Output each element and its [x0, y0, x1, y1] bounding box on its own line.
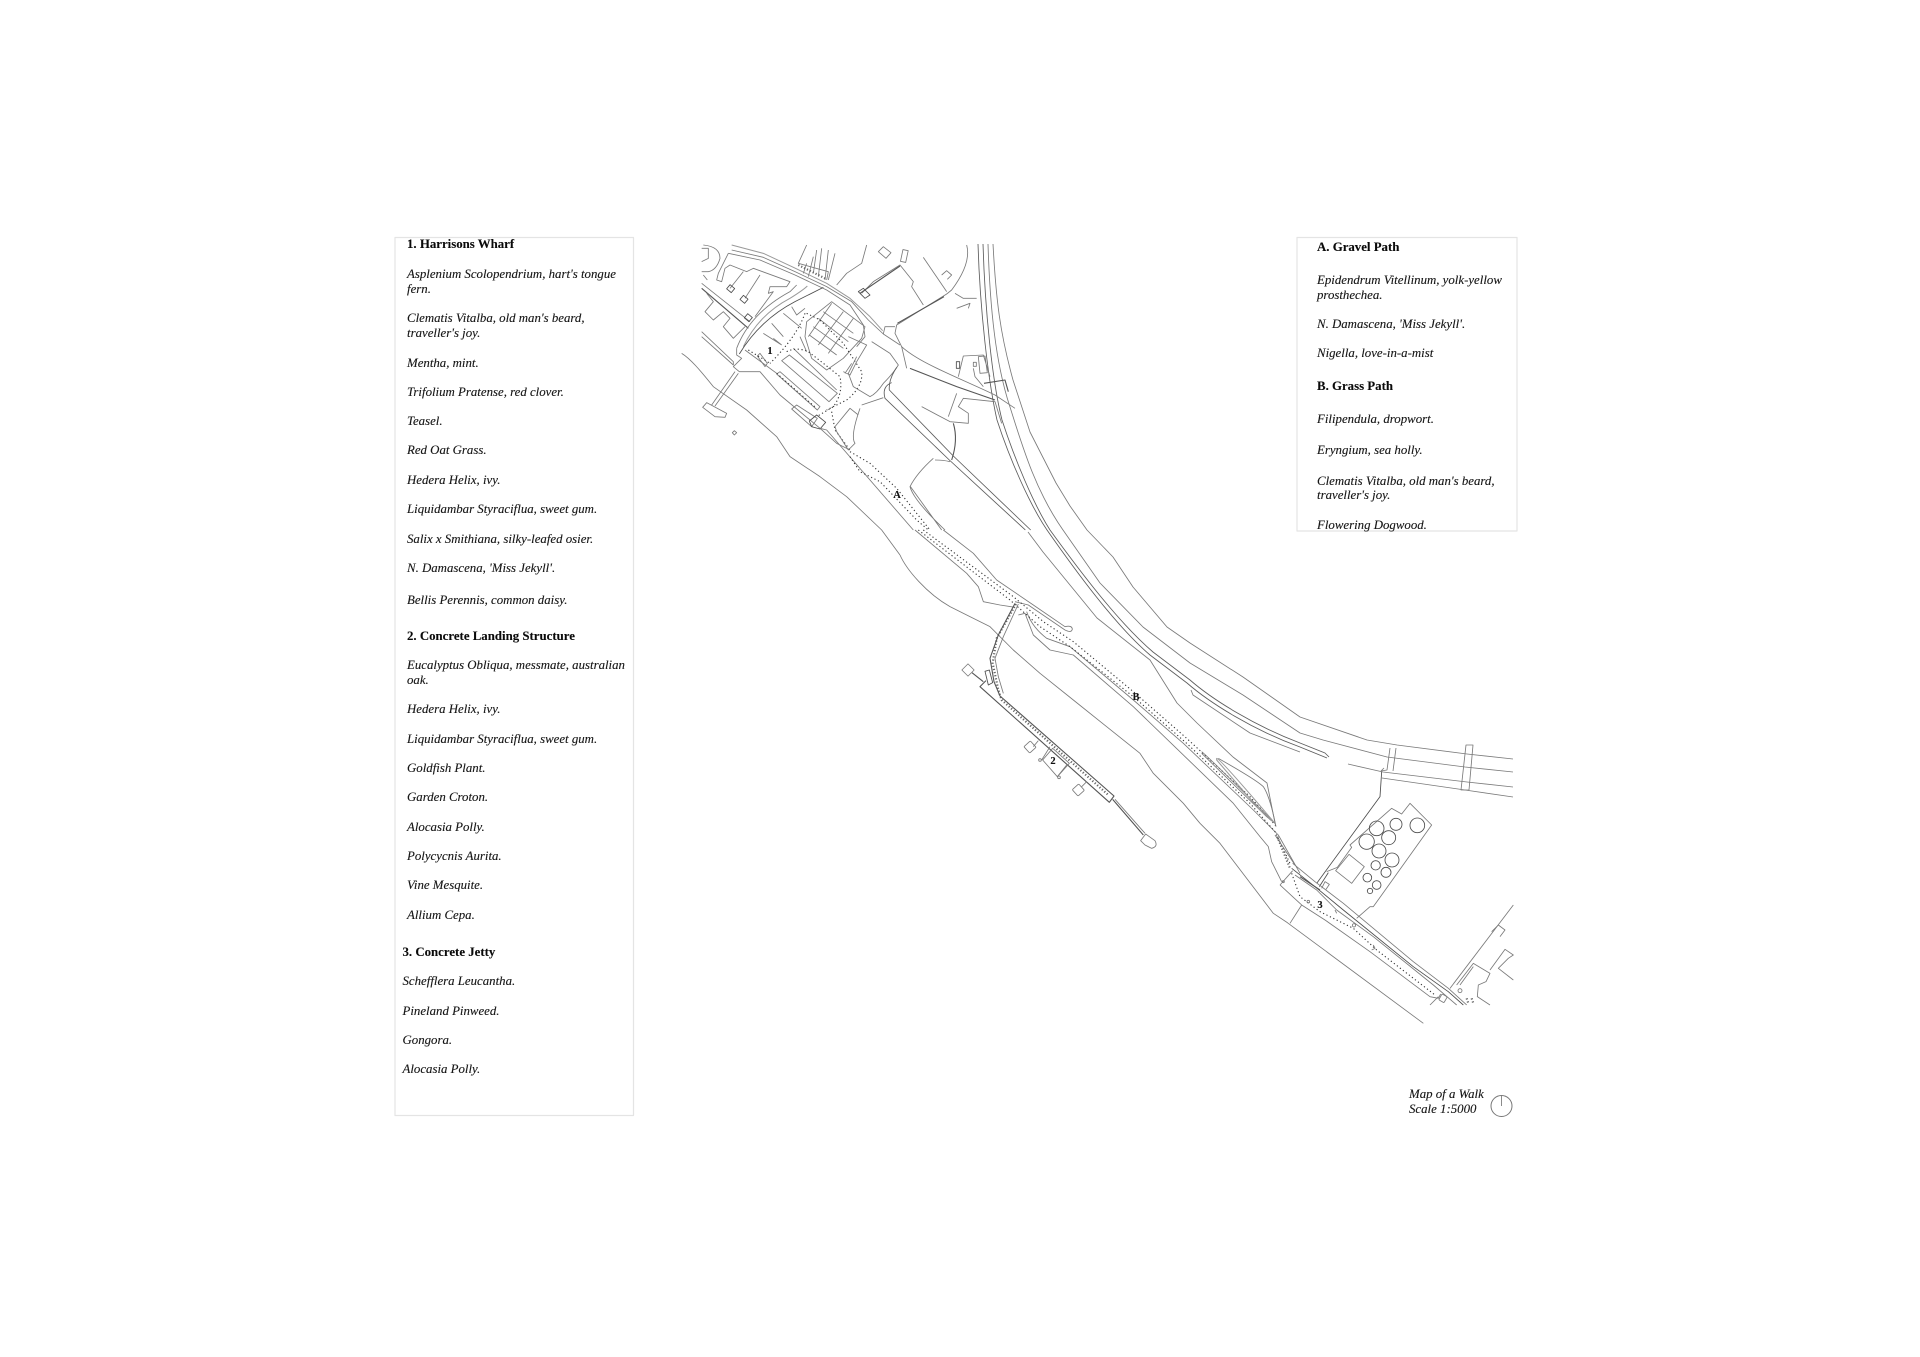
text block: Landing Structure plants: Alocasia Polly.: [406, 820, 485, 834]
text block: Grass Path plants: Eryngium, sea holly.: [1316, 443, 1423, 457]
path label B: B: [1132, 692, 1140, 703]
panel: path planting list: [1297, 238, 1517, 532]
river bank and middle walk section: [900, 530, 1300, 882]
upper path edge with end blob: [943, 530, 1072, 631]
location label 2: 2: [1050, 756, 1056, 767]
outer river bank: [900, 555, 1200, 823]
housing blocks: [702, 245, 835, 352]
map title and scale: Map of a Walk: [1408, 1087, 1484, 1101]
text block: Harrisons Wharf plants: traveller's joy.: [407, 326, 480, 340]
text block: Landing Structure plants: Garden Croton.: [407, 790, 488, 804]
junction walkway and jetty 2: [962, 603, 1156, 848]
planting strips: [1202, 752, 1276, 827]
text block: Grass Path plants: Filipendula, dropwort.: [1316, 412, 1434, 426]
square tank building: [1336, 854, 1364, 883]
text block: Gravel Path plants: [1316, 273, 1502, 360]
small jetty markers: [1282, 881, 1375, 950]
text block: Concrete Jetty plants: Gongora.: [402, 1033, 452, 1047]
text block: Landing Structure plants: Goldfish Plant.: [407, 761, 486, 775]
top road: [728, 245, 900, 347]
shoreline: [682, 353, 900, 555]
map of the walk: [682, 244, 1513, 1023]
dotted walk rows: [918, 530, 1290, 863]
storage tanks: [1359, 818, 1425, 894]
text block: Harrisons Wharf plants: Salix x Smithiana, silky-leafed osier.: [407, 532, 593, 546]
text block: Gravel Path plants: Epidendrum Vitellinum, yolk-yellow: [1316, 273, 1502, 287]
text block: Gravel Path plants: N. Damascena, 'Miss Jekyll'.: [1316, 317, 1465, 331]
icon: north point: [1491, 1096, 1512, 1116]
panel: site planting list: [395, 237, 634, 1116]
tank farm boundary: [1327, 803, 1432, 918]
pier and buildings on the shore: [703, 372, 850, 450]
dotted walk: [1277, 837, 1435, 995]
parallel service lines: [1275, 835, 1467, 1005]
lower path edges: [1018, 612, 1300, 882]
text block: Gravel Path plants: prosthechea.: [1316, 288, 1383, 302]
text block: Grass Path plants: [1316, 412, 1495, 532]
text block: Harrisons Wharf plants: fern.: [407, 282, 431, 296]
text block: Landing Structure plants: oak.: [407, 673, 429, 687]
location label 1: 1: [767, 346, 773, 357]
lower bank line: [1200, 823, 1423, 1023]
heading: A. Gravel Path: A. Gravel Path: [1317, 240, 1399, 254]
bridges: [1381, 745, 1473, 790]
text block: Harrisons Wharf plants: Teasel.: [407, 414, 443, 428]
text block: Concrete Jetty plants: Pineland Pinweed.: [402, 1004, 500, 1018]
text block: Concrete Jetty plants: [402, 974, 515, 1076]
text block: Grass Path plants: traveller's joy.: [1317, 488, 1390, 502]
north east buildings: [858, 245, 1015, 408]
heading: 1. Harrisons Wharf: 1. Harrisons Wharf: [407, 237, 515, 251]
path label A: A: [893, 490, 901, 501]
text block: Grass Path plants: Flowering Dogwood.: [1316, 518, 1427, 532]
heading: B. Grass Path: B. Grass Path: [1317, 379, 1393, 393]
location label 3: 3: [1317, 900, 1323, 911]
text block: Harrisons Wharf plants: Mentha, mint.: [406, 356, 479, 370]
text block: Gravel Path plants: Nigella, love-in-a-mist: [1316, 346, 1434, 360]
text block: Landing Structure plants: Eucalyptus Obliqua, messmate, australian: [406, 658, 625, 672]
text block: Harrisons Wharf plants: N. Damascena, 'Miss Jekyll'.: [406, 561, 555, 575]
tank farm and south east walk section: [1200, 772, 1513, 1023]
north west quarter with car park and gardens: [682, 245, 1031, 555]
text block: Landing Structure plants: Vine Mesquite.: [407, 878, 483, 892]
text block: Harrisons Wharf plants: Asplenium Scolopendrium, hart's tongue: [406, 267, 616, 281]
dotted gravel path in gardens: [748, 313, 930, 530]
south east buildings: [1430, 905, 1513, 1005]
text block: Landing Structure plants: Hedera Helix, ivy.: [406, 702, 500, 716]
text block: Harrisons Wharf plants: Liquidambar Styraciflua, sweet gum.: [406, 502, 597, 516]
text block: Landing Structure plants: Liquidambar Styraciflua, sweet gum.: [406, 732, 597, 746]
text block: Harrisons Wharf plants: Clematis Vitalba, old man's beard,: [407, 311, 585, 325]
text block: Harrisons Wharf plants: Hedera Helix, ivy.: [406, 473, 500, 487]
text block: Landing Structure plants: Allium Cepa.: [406, 908, 475, 922]
road corridor: [978, 244, 1513, 823]
text block: Landing Structure plants: Polycycnis Aurita.: [406, 849, 502, 863]
heading: 3. Concrete Jetty: 3. Concrete Jetty: [402, 945, 496, 959]
text block: Concrete Jetty plants: Schefflera Leucantha.: [402, 974, 515, 988]
text block: Harrisons Wharf plants: Bellis Perennis, common daisy.: [407, 593, 567, 607]
heading: 2. Concrete Landing Structure: 2. Concrete Landing Structure: [407, 629, 575, 643]
car park: [745, 302, 867, 410]
map title and scale: [1408, 1087, 1484, 1116]
text block: Landing Structure plants: [406, 658, 625, 922]
map title and scale: Scale 1:5000: [1409, 1102, 1477, 1116]
text block: Harrisons Wharf plants: [406, 267, 616, 607]
text block: Harrisons Wharf plants: Trifolium Pratense, red clover.: [407, 385, 564, 399]
paths and lawn edges: [835, 342, 1031, 530]
text block: Concrete Jetty plants: Alocasia Polly.: [402, 1062, 480, 1076]
bank wiggle at junction: [915, 530, 1015, 607]
curved access road: [702, 285, 913, 530]
jetty 3 apron: [1280, 871, 1441, 998]
text block: Harrisons Wharf plants: Red Oat Grass.: [406, 443, 487, 457]
text block: Grass Path plants: Clematis Vitalba, old man's beard,: [1317, 474, 1495, 488]
service road into tank farm: [1317, 772, 1382, 887]
